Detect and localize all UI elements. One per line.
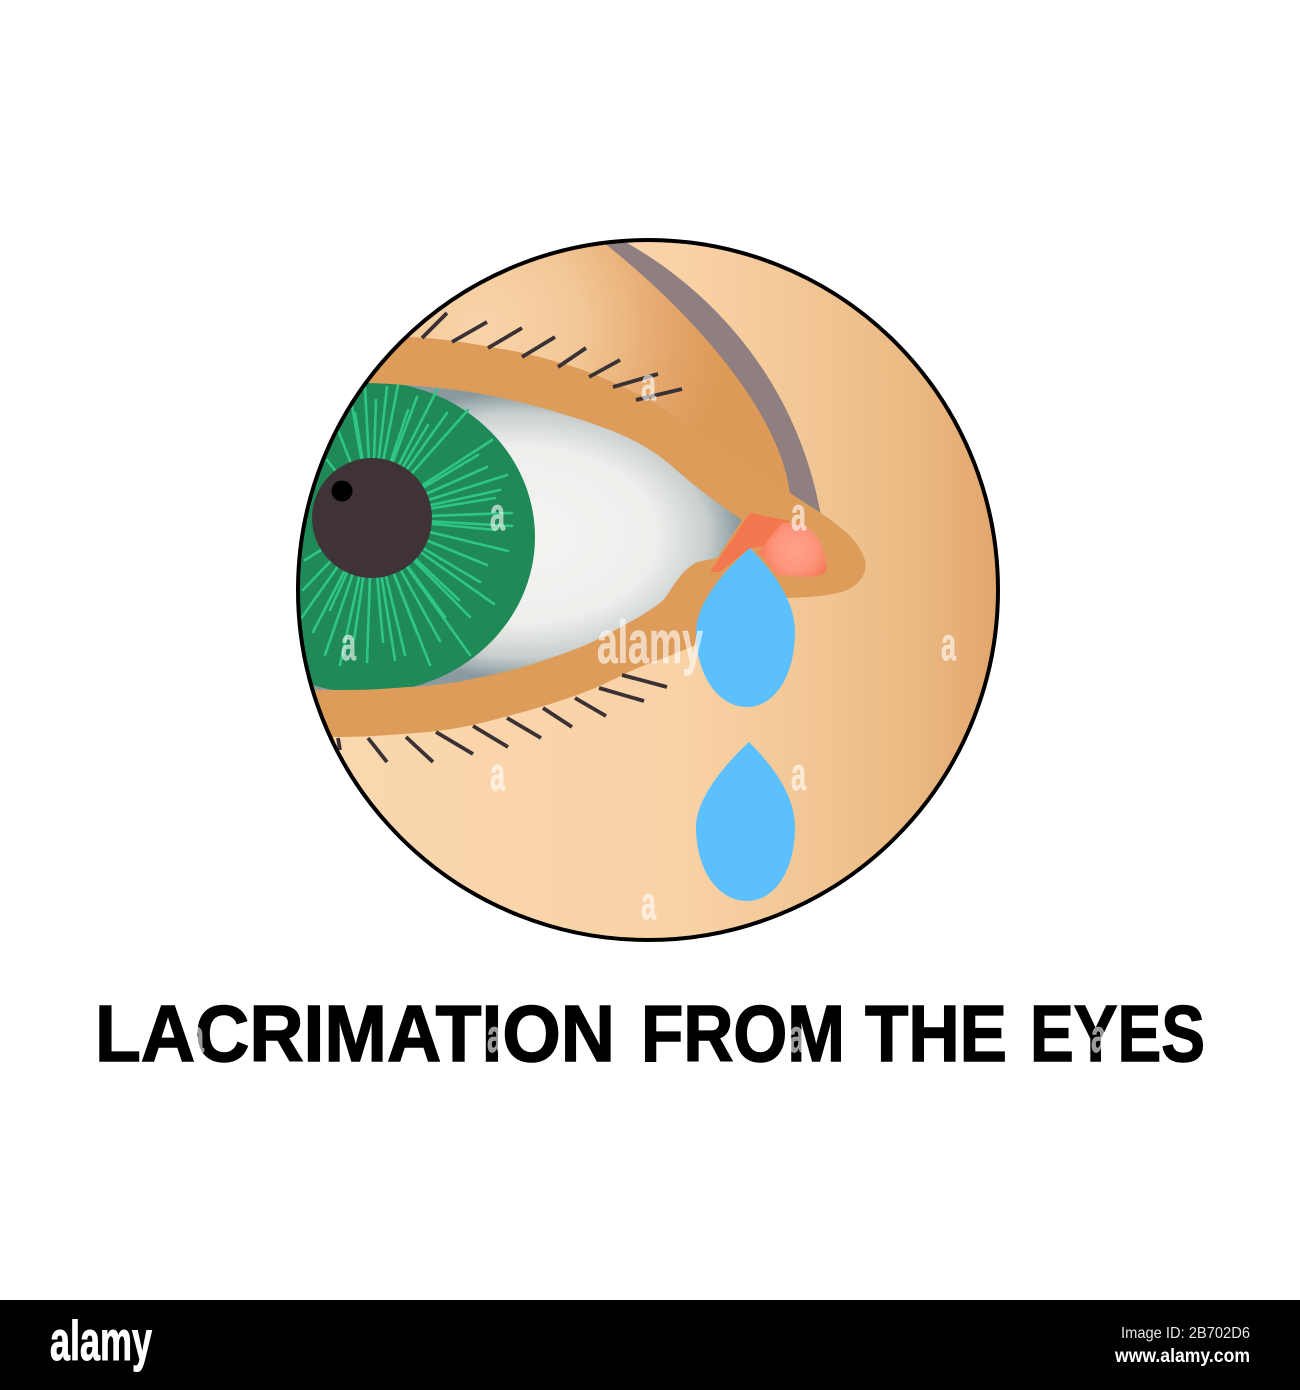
watermark marks: a (490, 748, 505, 800)
website: www.alamy.com (1114, 1346, 1250, 1367)
watermark marks: alamy (597, 609, 703, 676)
title: THE (865, 989, 1007, 1078)
watermark marks: a (641, 877, 656, 929)
watermark marks: a (490, 488, 505, 540)
pupil highlight (332, 480, 352, 502)
circle outline (298, 240, 998, 940)
lower lashes (338, 675, 667, 762)
pupil (312, 458, 432, 578)
watermark marks: a (641, 358, 656, 410)
clipped eye anatomy (300, 242, 866, 764)
iris rays (300, 385, 512, 665)
eyelid crease line (598, 238, 821, 516)
upper lashes (422, 313, 682, 400)
footer bar (0, 1300, 1300, 1390)
watermark marks: a (1091, 1010, 1106, 1062)
caruncle pink blob (758, 522, 827, 577)
upper and lower eyelid (300, 335, 866, 738)
inner corner caruncle (710, 513, 790, 572)
watermark marks: a (189, 1010, 204, 1062)
watermark marks: a (341, 618, 356, 670)
image id: Image ID: 2B702D6 (1121, 1325, 1250, 1342)
watermark marks: a (487, 1010, 502, 1062)
eye illustration in circle (296, 238, 1000, 942)
upper eyelid fold (410, 244, 790, 493)
watermark marks: a (791, 748, 806, 800)
title: EYES (1030, 989, 1205, 1078)
tear drop upper (696, 548, 795, 707)
watermark marks: a (789, 1010, 804, 1062)
watermark marks: a (941, 618, 956, 670)
footer logo: alamy (50, 1309, 152, 1372)
eyeball sclera (313, 384, 742, 690)
tear drop lower (696, 742, 795, 901)
title (95, 989, 1205, 1078)
watermark marks: a (791, 488, 806, 540)
iris (300, 383, 535, 690)
watermark marks (189, 358, 1106, 1062)
title: LACRIMATION (95, 989, 615, 1078)
title: FROM (641, 989, 845, 1078)
skin disc (298, 240, 998, 940)
